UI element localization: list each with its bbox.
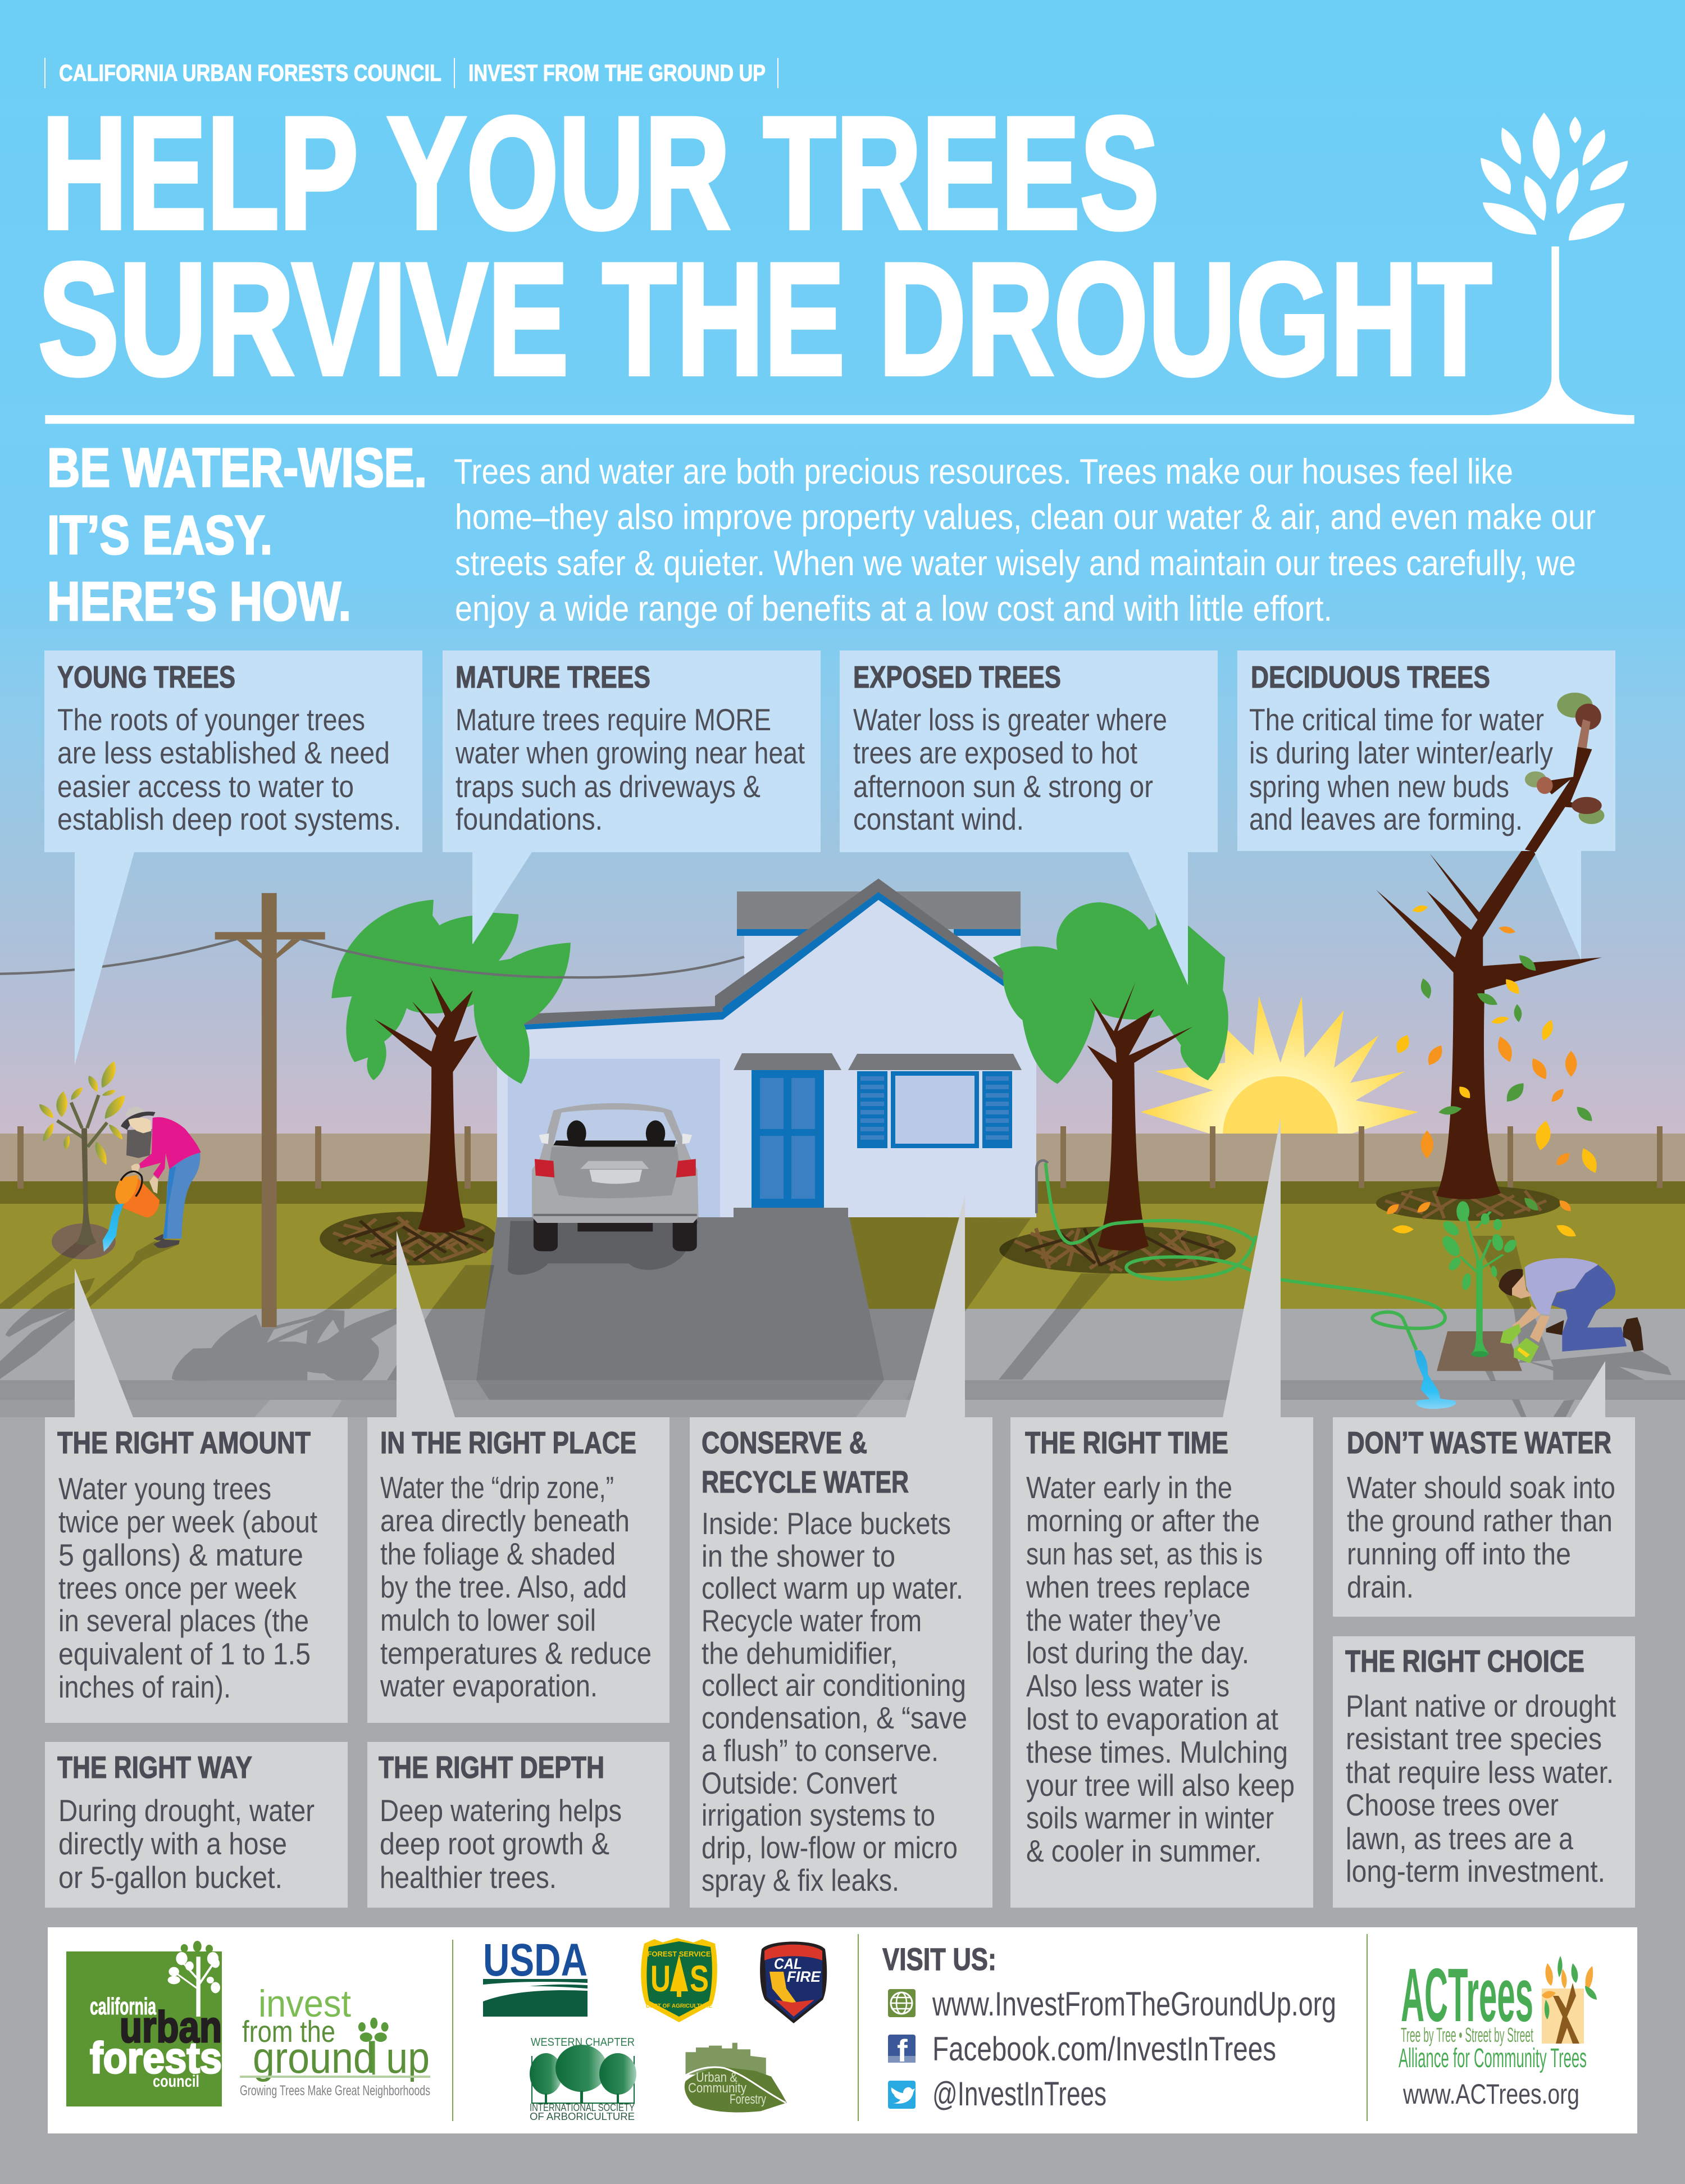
body text: a flush” to conserve.: [702, 1733, 939, 1768]
cast shadows: [0, 1217, 1672, 1417]
logo: urban and community forestry leaf: [670, 2043, 787, 2113]
logo: international society of arboriculture: [530, 2036, 636, 2122]
body text: The roots of younger trees: [57, 702, 365, 737]
body text: Water the “drip zone,”: [380, 1470, 614, 1505]
panel: don't waste water: [1333, 1417, 1635, 1617]
twitter row: [888, 2075, 1106, 2113]
title: [38, 84, 1492, 408]
body text: afternoon sun & strong or: [853, 769, 1153, 804]
window awning: [848, 1054, 1022, 1070]
green sapling: [1439, 1201, 1519, 1357]
body text: foundations.: [456, 802, 603, 836]
body text: Water young trees: [58, 1471, 271, 1506]
upper back roof: [722, 891, 1021, 1067]
body text: Choose trees over: [1346, 1787, 1559, 1822]
sky background: [0, 0, 1685, 1134]
body text: these times. Mulching: [1026, 1735, 1288, 1769]
man planting young tree: [1437, 1201, 1643, 1371]
body text: condensation, & “save: [702, 1700, 967, 1735]
facebook row: Facebook.com/InvestInTrees: [932, 2030, 1276, 2068]
body text: the dehumidifier,: [702, 1636, 898, 1671]
driveway: [476, 1217, 917, 1400]
heading: CONSERVE &: [702, 1425, 867, 1460]
body text: directly with a hose: [58, 1826, 287, 1861]
sapling: [39, 1061, 125, 1245]
body text: easier access to water to: [57, 769, 354, 804]
body text: spring when new buds: [1249, 769, 1509, 804]
logo: forest service shield: [641, 1938, 717, 2022]
body text: healthier trees.: [380, 1860, 557, 1895]
heading: THE RIGHT CHOICE: [1345, 1644, 1584, 1678]
logo: forest service shield: S: [690, 1958, 709, 1999]
heading: THE RIGHT WAY: [57, 1750, 252, 1785]
car: [508, 1103, 699, 1275]
body text: are less established & need: [57, 735, 390, 770]
sapling and woman watering: [39, 1061, 201, 1252]
footer band: [48, 1927, 1637, 2133]
icon: twitter bird: [888, 2081, 916, 2109]
logo: cal fire shield: FIRE: [787, 1968, 821, 1985]
body text: establish deep root systems.: [57, 802, 401, 836]
body text: the ground rather than: [1347, 1503, 1613, 1538]
logo: cal fire shield: CAL: [774, 1955, 802, 1972]
deciduous tree: [1376, 747, 1602, 1240]
logo: actrees: [1399, 1953, 1597, 2110]
logo: urban and community forestry leaf: Forestry: [730, 2092, 766, 2107]
body text: your tree will also keep: [1026, 1768, 1295, 1803]
logo: california urban forests council: [66, 1941, 222, 2106]
twitter row: @InvestInTrees: [932, 2075, 1106, 2113]
panel: conserve and recycle water: [690, 1417, 992, 1908]
body text: [455, 702, 805, 836]
panel: in the right place: [367, 1417, 670, 1723]
logo text: council: [153, 2072, 199, 2091]
body text: During drought, water: [58, 1793, 315, 1828]
website row: www.InvestFromTheGroundUp.org: [932, 1985, 1336, 2023]
body text: 5 gallons) & mature: [58, 1537, 303, 1572]
body text: Water early in the: [1026, 1470, 1232, 1505]
heading: visit us: VISIT US:: [882, 1941, 996, 1977]
icon: facebook: f: [897, 2033, 908, 2068]
logo: forest service shield: FOREST SERVICE: [647, 1950, 711, 1958]
body text: resistant tree species: [1346, 1721, 1602, 1756]
body text: long-term investment.: [1346, 1854, 1605, 1889]
door: [752, 1070, 824, 1208]
body text: and leaves are forming.: [1249, 802, 1523, 836]
logo tree: [168, 1941, 220, 2017]
logo: USDA: USDA: [483, 1935, 588, 1986]
body text: [853, 702, 1167, 836]
body text: [380, 1470, 652, 1703]
body text: water evaporation.: [380, 1668, 598, 1703]
house: [497, 879, 1036, 1223]
logo: urban and community forestry leaf: Urban &: [696, 2070, 737, 2085]
logo: invest from the ground up: from the: [242, 2015, 335, 2049]
intro paragraph: Trees and water are both precious resources. Trees make our houses feel like: [454, 452, 1513, 492]
utility pole and wires: [0, 893, 325, 1327]
body text: collect warm up water.: [702, 1571, 963, 1605]
icon: globe: [888, 1989, 916, 2017]
falling leaves: [1384, 904, 1601, 1240]
body text: lawn, as trees are a: [1346, 1821, 1573, 1856]
body text: morning or after the: [1026, 1503, 1260, 1538]
panel: the right depth: [367, 1742, 670, 1908]
kneeling man: [1499, 1258, 1643, 1363]
roof blue trim: [524, 892, 1004, 1030]
logo: actrees: www.ACTrees.org: [1402, 2078, 1579, 2110]
top label strip: CALIFORNIA URBAN FORESTS COUNCIL: [59, 60, 441, 86]
heading: RECYCLE WATER: [702, 1464, 909, 1499]
body text: Also less water is: [1026, 1668, 1229, 1703]
body text: drain.: [1347, 1569, 1414, 1604]
body text: the water they’ve: [1026, 1603, 1221, 1637]
faucet and hose near wall: [1036, 1161, 1254, 1243]
body text: or 5-gallon bucket.: [58, 1860, 283, 1895]
dirt ring around sapling: [52, 1223, 116, 1259]
body text: Mature trees require MORE: [456, 702, 771, 737]
body text: Plant native or drought: [1346, 1689, 1616, 1723]
body text: is during later winter/early: [1249, 735, 1553, 770]
door step: [734, 1208, 848, 1223]
fence posts: [17, 1126, 1663, 1189]
icon: facebook: [888, 2033, 916, 2068]
body text: spray & fix leaks.: [702, 1863, 899, 1898]
body text: Deep watering helps: [380, 1793, 622, 1828]
body text: in the shower to: [702, 1539, 895, 1573]
body text: when trees replace: [1026, 1569, 1250, 1604]
heading: THE RIGHT AMOUNT: [57, 1425, 311, 1460]
body text: the foliage & shaded: [380, 1536, 616, 1571]
sky callout pointers: [75, 851, 1581, 1065]
body text: Inside: Place buckets: [702, 1506, 951, 1541]
panel: the right way: [45, 1742, 348, 1908]
body text: deep root growth &: [380, 1826, 609, 1861]
logo text: [90, 1993, 222, 2091]
logo: invest from the ground up: ground up: [253, 2033, 430, 2082]
body text: irrigation systems to: [702, 1798, 935, 1832]
logo: international society of arboriculture: INTERNATIONAL SOCIETY: [530, 2102, 635, 2113]
window with shutters: [857, 1071, 1012, 1148]
panel: mature trees: [443, 650, 821, 852]
body text: Water loss is greater where: [853, 702, 1167, 737]
subheading: be water-wise: [47, 437, 427, 632]
heading: IN THE RIGHT PLACE: [380, 1425, 636, 1460]
body text: drip, low-flow or micro: [702, 1830, 958, 1865]
body text: that require less water.: [1346, 1755, 1614, 1790]
body text: inches of rain).: [58, 1669, 231, 1704]
logo text: forests: [90, 2033, 222, 2082]
top label strip: [44, 58, 778, 88]
trunk: [375, 977, 477, 1232]
heading: THE RIGHT TIME: [1025, 1425, 1228, 1460]
body text: trees are exposed to hot: [853, 735, 1137, 770]
body text: twice per week (about: [58, 1504, 317, 1539]
leaf sprig: [358, 2018, 389, 2074]
body text: The critical time for water: [1249, 702, 1544, 737]
body text: [1249, 702, 1553, 836]
logo: cal fire shield: [760, 1941, 827, 2023]
panel: the right choice: [1333, 1636, 1635, 1908]
body text: Water should soak into: [1347, 1470, 1615, 1505]
hose on lawn and water spill: [1126, 1236, 1456, 1409]
title: HELP YOUR TREES: [42, 84, 1159, 262]
body text: [57, 702, 401, 836]
body text: in several places (the: [58, 1603, 309, 1638]
body text: [1346, 1689, 1616, 1889]
subheading: be water-wise: HERE’S HOW.: [47, 571, 351, 632]
ground layers: [0, 1134, 1685, 2184]
body text: by the tree. Also, add: [380, 1569, 627, 1604]
body text: [58, 1793, 315, 1895]
icon: white tree with ground rule: [45, 112, 1634, 424]
logo text: california: [90, 1993, 156, 2019]
body text: lost during the day.: [1026, 1635, 1249, 1670]
body text: area directly beneath: [380, 1503, 630, 1538]
subheading: be water-wise: BE WATER-WISE.: [47, 437, 427, 498]
body text: Outside: Convert: [702, 1766, 897, 1800]
panel: the right amount: [45, 1417, 348, 1723]
intro paragraph: enjoy a wide range of benefits at a low cost and with little effort.: [455, 589, 1332, 629]
sun: [1141, 996, 1418, 1134]
body text: [1026, 1470, 1295, 1868]
heading: DECIDUOUS TREES: [1251, 659, 1490, 694]
tree mark: [1542, 1956, 1597, 2044]
panel: young trees: [44, 650, 422, 852]
top label strip: INVEST FROM THE GROUND UP: [468, 60, 766, 86]
tree two: [993, 902, 1254, 1250]
body text: traps such as driveways &: [456, 769, 760, 804]
heading: THE RIGHT DEPTH: [379, 1750, 604, 1785]
body text: trees once per week: [58, 1571, 297, 1605]
heading: [702, 1425, 909, 1499]
panel: exposed trees: [840, 650, 1218, 852]
body text: soils warmer in winter: [1026, 1800, 1274, 1835]
door awning: [734, 1053, 841, 1070]
body text: sun has set, as this is: [1026, 1536, 1263, 1571]
body text: mulch to lower soil: [380, 1603, 596, 1637]
body text: temperatures & reduce: [380, 1636, 652, 1671]
mulch bed: tree one: [320, 1212, 497, 1266]
logo: invest from the ground up: [240, 1982, 430, 2099]
logo: forest service shield: DEPT OF AGRICULTURE: [646, 2003, 712, 2009]
logo: forest service shield: U: [650, 1958, 671, 1999]
tree one: [301, 900, 744, 1232]
trunk: [1087, 982, 1193, 1250]
logo: USDA: [483, 1935, 588, 2017]
woman: [103, 1107, 201, 1252]
panel: deciduous trees: [1237, 650, 1615, 851]
heading: MATURE TREES: [456, 659, 650, 694]
logo: international society of arboriculture: OF ARBORICULTURE: [530, 2111, 635, 2122]
foliage: [331, 900, 571, 1084]
body text: & cooler in summer.: [1026, 1833, 1262, 1868]
logo: international society of arboriculture: WESTERN CHAPTER: [531, 2036, 635, 2049]
body text: collect air conditioning: [702, 1668, 966, 1703]
panel: the right time: [1010, 1417, 1313, 1908]
subheading: be water-wise: IT’S EASY.: [47, 504, 272, 566]
logo: invest from the ground up: Growing Trees Make Great Neighborhoods: [240, 2083, 430, 2099]
body text: [1347, 1470, 1615, 1604]
ground callout pointers: [75, 1118, 1605, 1418]
foliage: [993, 902, 1228, 1084]
heading: DON’T WASTE WATER: [1347, 1425, 1611, 1460]
garage opening: [508, 1059, 720, 1217]
heading: YOUNG TREES: [57, 659, 235, 694]
heading: EXPOSED TREES: [853, 659, 1061, 694]
logo: urban and community forestry leaf: Community: [688, 2081, 746, 2096]
logo: actrees: Tree by Tree • Street by Street: [1401, 2023, 1533, 2046]
body text: equivalent of 1 to 1.5: [58, 1636, 311, 1671]
logo text: urban: [120, 2002, 222, 2051]
intro paragraph: [454, 452, 1596, 629]
body text: running off into the: [1347, 1536, 1571, 1571]
main roof: [524, 879, 1004, 1025]
body text: [702, 1506, 967, 1898]
body text: water when growing near heat: [455, 735, 805, 770]
body text: constant wind.: [853, 802, 1024, 836]
body text: lost to evaporation at: [1026, 1701, 1278, 1736]
trunk and branches: [1376, 747, 1602, 1199]
second wire: [301, 939, 744, 977]
deciduous branch and buds over panel: [1525, 693, 1604, 852]
body text: [380, 1793, 622, 1895]
body text: Recycle water from: [702, 1603, 922, 1638]
mulch bed: deciduous tree: [1376, 1186, 1561, 1221]
mulch bed: tree two: [999, 1226, 1236, 1273]
logo: invest from the ground up: invest: [258, 1982, 351, 2025]
body text: [58, 1471, 317, 1704]
dirt square: [1437, 1331, 1522, 1371]
